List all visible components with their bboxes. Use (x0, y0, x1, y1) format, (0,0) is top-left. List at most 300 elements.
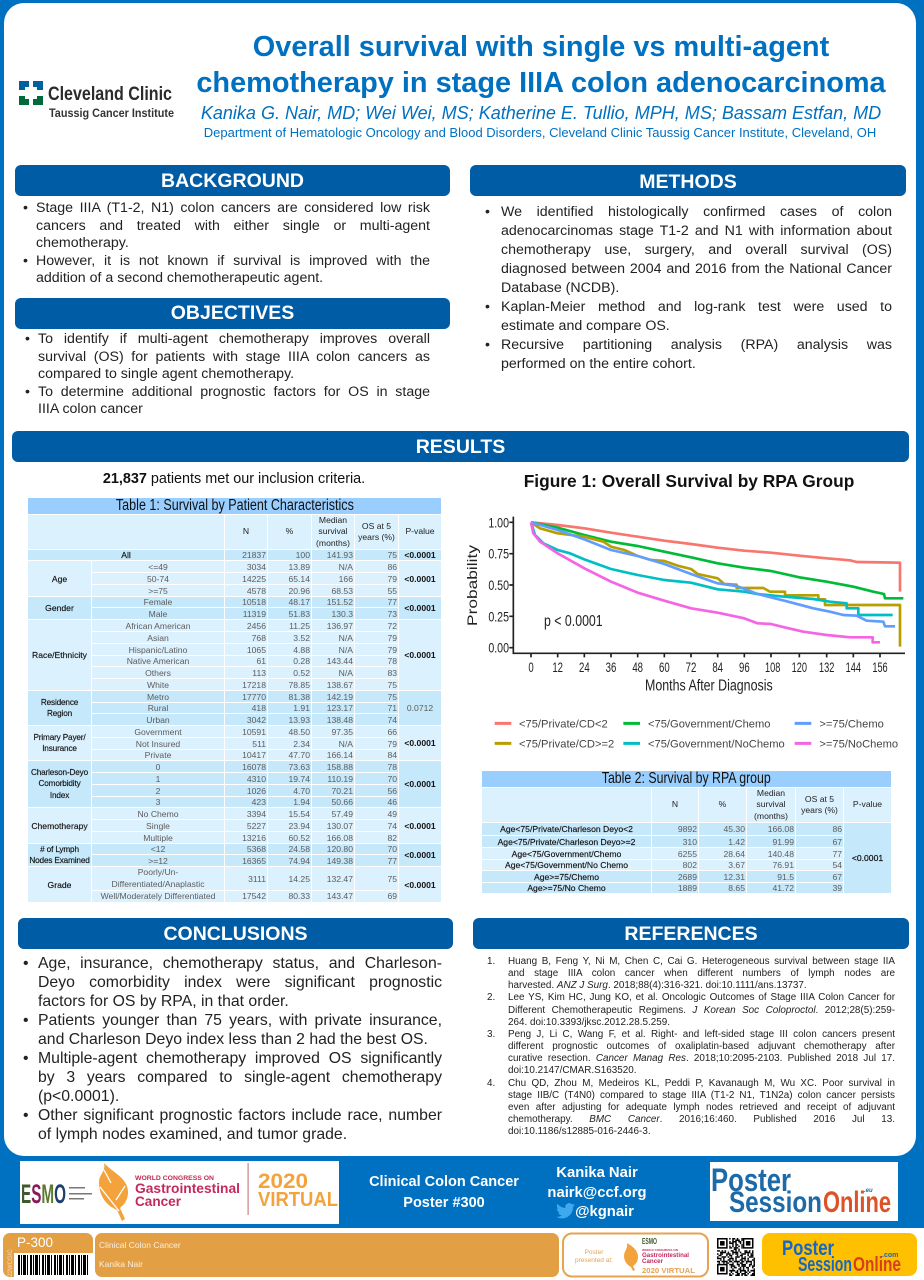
table 1: survival by patient characteristics: 75 (387, 550, 397, 560)
text: inclusion count: 21,837 patients met our inclusion criteria. (103, 471, 365, 487)
table 1: survival by patient characteristics: Not Insured (136, 738, 180, 748)
table 2: survival by RPA group: P-value (853, 799, 882, 809)
chart: Kaplan-Meier survival curves: p < 0.0001 (544, 613, 603, 630)
table 1: survival by patient characteristics: 166 (339, 574, 353, 584)
text: background bullets: However, it is not known if survival is improved with the addition of a second chemotherapeutic agent. (36, 252, 430, 286)
table 1: survival by patient characteristics: 511 (252, 738, 266, 748)
text: references list: Huang B, Feng Y, Ni M, Chen C, Cai G. Heterogeneous survival between stage IIA (508, 956, 895, 967)
table 2: survival by RPA group: 310 (683, 836, 697, 846)
table 1: survival by patient characteristics: Index (50, 791, 69, 800)
table 2: survival by RPA group: 802 (683, 860, 697, 870)
table 1: survival by patient characteristics: 83 (387, 668, 397, 678)
logo: Poster Session Online com: Online (853, 1254, 901, 1276)
y axis labels (488, 514, 509, 656)
badge: poster presented at: Gastrointestinal (642, 1253, 689, 1259)
table 1: survival by patient characteristics: 3042 (247, 714, 266, 724)
table 1: survival by patient characteristics: 77 (387, 856, 397, 866)
table 1: survival by patient characteristics: Hispanic/Latino (129, 644, 187, 654)
table 1: survival by patient characteristics: 73.63 (288, 762, 310, 772)
text: author contact: Kanika Nair (556, 1165, 638, 1181)
chart: Kaplan-Meier survival curves (464, 514, 905, 750)
text: references list: doi:10.1186/s12885-016-2446-3. (508, 1126, 651, 1137)
table 2: survival by RPA group: 67 (832, 872, 842, 882)
table 1: survival by patient characteristics: 1.94 (293, 797, 310, 807)
text: conclusions bullets: Patients younger than 75 years, with private insurance, and Charleson Deyo index less than 2 had the best OS. (38, 1012, 442, 1048)
table 1: survival by patient characteristics: 166.08 (327, 832, 353, 842)
text: methods bullets: performed on the entire cohort. (501, 356, 696, 372)
x axis labels: 60 (659, 659, 670, 675)
table 2: survival by RPA group: 1889 (678, 883, 697, 893)
heading: references (473, 918, 909, 949)
table 2: survival by RPA group: N (672, 799, 678, 809)
table 1: survival by patient characteristics: Poorly/Un- (138, 867, 178, 877)
table 2: survival by RPA group: 6255 (678, 848, 697, 858)
heading: methods (470, 165, 906, 196)
table 1: survival by patient characteristics: <0.0001 (404, 880, 436, 890)
table 2: survival by RPA group: 76.91 (772, 860, 794, 870)
table 1: survival by patient characteristics: 13.93 (288, 714, 310, 724)
table 2: survival by RPA group: 91.5 (777, 872, 794, 882)
text: 3. (487, 1029, 495, 1040)
table 1: survival by patient characteristics: 78 (387, 656, 397, 666)
table 2: survival by RPA group: % (719, 799, 726, 809)
table 2: survival by RPA group: Age<75/Private/Charleson Deyo<2 (500, 824, 633, 834)
table 1: survival by patient characteristics: 71 (387, 703, 397, 713)
table 1: survival by patient characteristics: 20.96 (288, 586, 310, 596)
table 1: survival by patient characteristics: 3111 (248, 874, 266, 884)
table 1: survival by patient characteristics: <0.0001 (404, 820, 436, 830)
table 2: survival by RPA group: 77 (832, 848, 842, 858)
table 1: survival by patient characteristics: Urban (146, 714, 170, 724)
table 1: survival by patient characteristics: 120.80 (327, 844, 353, 854)
chart legend: <75/Private/CD>=2 (519, 738, 614, 750)
table 1: survival by patient characteristics: 13.89 (288, 562, 310, 572)
text: session: Clinical Colon Cancer (99, 1240, 181, 1250)
table 1: survival by patient characteristics: 82 (387, 832, 397, 842)
table 2: survival by RPA group: 3.67 (728, 860, 745, 870)
table 1: survival by patient characteristics: 11319 (243, 608, 266, 618)
y axis labels: 0.25 (488, 608, 509, 624)
table 2: survival by RPA group: 9892 (678, 824, 697, 834)
table 2: survival by RPA group: OS at 5 years (%) (801, 794, 838, 815)
x axis labels (528, 659, 888, 675)
table 2: survival by RPA group: 8.65 (728, 883, 745, 893)
table 1: survival by patient characteristics: 77 (387, 597, 397, 607)
table 2: survival by RPA group: 140.48 (768, 848, 794, 858)
table 1: survival by patient characteristics: 74 (387, 714, 397, 724)
x axis labels: 144 (846, 659, 861, 675)
table 1: survival by patient characteristics: 110.19 (327, 774, 353, 784)
table 1: survival by patient characteristics: 4.88 (293, 644, 310, 654)
table 1: survival by patient characteristics: 0.52 (293, 668, 310, 678)
table 1: survival by patient characteristics: 1026 (247, 786, 266, 796)
table 2: survival by RPA group: Age>=75/Chemo (534, 872, 599, 882)
logo: Cleveland Clinic Taussig Cancer Institute (19, 81, 174, 120)
text: background bullets: Stage IIIA (T1-2, N1) colon cancers are considered low risk cancers and treated with either single or multi-agent chemotherapy. (36, 200, 430, 251)
x axis labels: 132 (819, 659, 834, 675)
table 1: survival by patient characteristics: <0.0001 (404, 650, 436, 660)
text: references list: even after adjusting for adequate lymph nodes retrieved and receipt of adjuvant (508, 1102, 895, 1113)
table 1: survival by patient characteristics: # of Lymph (40, 845, 79, 854)
text: objectives bullets (26, 331, 430, 417)
table 1: survival by patient characteristics: All (121, 550, 131, 560)
table 1: survival by patient characteristics: 10417 (242, 750, 266, 760)
text: author: Kanika Nair (99, 1259, 143, 1269)
text: references list: Lee YS, Kim HC, Jung KO, et al. Oncologic Outcomes of Stage IIIA Colon Cancer for (508, 992, 895, 1003)
table 1: survival by patient characteristics: 0 (156, 762, 160, 772)
table 1: survival by patient characteristics: <12 (151, 844, 165, 854)
table 1: survival by patient characteristics: 19.74 (288, 774, 310, 784)
table 1: survival by patient characteristics: 51.83 (288, 608, 310, 618)
table 1: survival by patient characteristics: 55 (387, 586, 397, 596)
text: session and poster number: Poster #300 (403, 1195, 485, 1211)
table 2: survival by RPA group: 91.99 (772, 836, 794, 846)
table 1: survival by patient characteristics: 17542 (242, 891, 266, 901)
figure heading: Figure 1: Overall Survival by RPA Group (524, 471, 854, 491)
table 1: survival by patient characteristics: 5368 (247, 844, 266, 854)
chart: Kaplan-Meier survival curves: Months After Diagnosis (645, 678, 773, 695)
table 1: survival by patient characteristics: Median survival (months) (316, 515, 350, 548)
table 1: survival by patient characteristics: 86 (387, 562, 397, 572)
chart legend (495, 718, 898, 750)
table 1: survival by patient characteristics: 79 (387, 738, 397, 748)
table 1: survival by patient characteristics: 138.67 (327, 680, 353, 690)
table 1: survival by patient characteristics: 70 (387, 844, 397, 854)
table 1: survival by patient characteristics: 75 (387, 680, 397, 690)
table 1: survival by patient characteristics: 166.14 (327, 750, 353, 760)
heading: objectives: OBJECTIVES (171, 302, 294, 324)
logo: Poster Session Online com: Poster (782, 1237, 834, 1260)
table 1: survival by patient characteristics: Grade (48, 880, 71, 890)
table 1: survival by patient characteristics: White (147, 680, 169, 690)
table 1: survival by patient characteristics: 47.70 (288, 750, 310, 760)
table 1: survival by patient characteristics: 78.85 (288, 680, 310, 690)
table 1: survival by patient characteristics: 10591 (242, 726, 266, 736)
table 1: survival by patient characteristics: 49 (387, 808, 397, 818)
title (196, 31, 886, 98)
table 1: survival by patient characteristics: 149.38 (327, 856, 353, 866)
table 1: survival by patient characteristics: 3394 (247, 808, 266, 818)
tag: poster number and barcode (3, 1233, 93, 1277)
text: references list (487, 956, 895, 1137)
text: references list: stage IIB/C (T4N0) compared to stage IIIA (T1-2 N1, T1N2a) colon cancer persists (508, 1090, 895, 1101)
logo: Poster Session Online eu (710, 1162, 898, 1221)
chart legend: >=75/NoChemo (819, 738, 898, 750)
table 1: survival by patient characteristics: 1.91 (293, 703, 310, 713)
table 1: survival by patient characteristics: 57.49 (331, 808, 353, 818)
table 1: survival by patient characteristics: 130.07 (327, 820, 353, 830)
table 1: survival by patient characteristics: 0.28 (293, 656, 310, 666)
chart: Kaplan-Meier survival curves: Probability (464, 545, 480, 626)
table 1: survival by patient characteristics: No Chemo (137, 808, 179, 818)
table 1: survival by patient characteristics: 81.38 (288, 692, 310, 702)
table 1: survival by patient characteristics: 138.48 (327, 714, 353, 724)
table 2: survival by RPA group: Age<75/Government/Chemo (512, 848, 621, 858)
table 1: survival by patient characteristics: >=12 (148, 856, 168, 866)
table 1: survival by patient characteristics: 78 (387, 762, 397, 772)
table 1: survival by patient characteristics: 4310 (247, 774, 266, 784)
tag: session and author (95, 1233, 559, 1277)
table 2: survival by RPA group: Table 2: Survival by RPA group (602, 770, 771, 787)
authors: Kanika G. Nair, MD; Wei Wei, MS; Katherine E. Tullio, MPH, MS; Bassam Estfan, MD (201, 103, 881, 123)
table 1: survival by patient characteristics: N/A (339, 738, 353, 748)
table 1: survival by patient characteristics: Single (146, 820, 170, 830)
table 1: survival by patient characteristics: 4.70 (293, 786, 310, 796)
x axis labels: 24 (579, 659, 590, 675)
table 1: survival by patient characteristics: African American (126, 620, 190, 630)
chart legend: >=75/Chemo (819, 718, 884, 730)
table 1: survival by patient characteristics: 79 (387, 644, 397, 654)
table 1: survival by patient characteristics: 13216 (242, 832, 266, 842)
table 1: survival by patient characteristics: 2.34 (293, 738, 310, 748)
table 1: survival by patient characteristics: 16365 (242, 856, 266, 866)
heading: results (12, 431, 909, 462)
text: objectives bullets: To determine additional prognostic factors for OS in stage (38, 384, 430, 400)
table 2: survival by RPA group: 28.64 (723, 848, 745, 858)
x axis labels: 36 (606, 659, 616, 675)
table 1: survival by patient characteristics: 72 (387, 620, 397, 630)
table 1: survival by patient characteristics: 136.97 (327, 620, 353, 630)
text: methods bullets: Kaplan-Meier method and log-rank test were used to (501, 299, 892, 315)
table 1: survival by patient characteristics: 123.17 (327, 703, 353, 713)
table 1: survival by patient characteristics: 48.17 (288, 597, 310, 607)
text: vertical code: 22WCGIC (8, 1249, 14, 1277)
table 1: survival by patient characteristics: 768 (252, 632, 266, 642)
table 1: survival by patient characteristics: P-value (405, 526, 435, 536)
table 2: survival by RPA group: 45.30 (723, 824, 745, 834)
table 2: survival by RPA group: 12.31 (723, 872, 745, 882)
table 1: survival by patient characteristics: N (243, 526, 249, 536)
text: 4. (487, 1078, 495, 1089)
table 1: survival by patient characteristics: 141.93 (327, 550, 353, 560)
table 1: survival by patient characteristics: 142.19 (327, 692, 353, 702)
table 1: survival by patient characteristics: Native American (127, 656, 189, 666)
logo: Poster Session Online eu: .eu (864, 1188, 873, 1194)
text: 1. (487, 956, 495, 967)
text: conclusions bullets (24, 955, 442, 1143)
table 2: survival by RPA group: Age<75/Private/Charleson Deyo>=2 (498, 836, 635, 846)
y axis labels: 1.00 (488, 514, 509, 530)
table 1: survival by patient characteristics: 113 (252, 668, 266, 678)
table 1: survival by patient characteristics: 50.66 (331, 797, 353, 807)
table 1: survival by patient characteristics: Female (144, 597, 172, 607)
heading: background (15, 165, 450, 196)
table 1: survival by patient characteristics: Residence (41, 698, 78, 707)
table 1: survival by patient characteristics: Charleson-Deyo (31, 768, 88, 777)
table 1: survival by patient characteristics: 143.47 (327, 891, 353, 901)
chart legend: <75/Government/NoChemo (648, 738, 785, 750)
table 2: survival by RPA group: 41.72 (772, 883, 794, 893)
table 1: survival by patient characteristics: 79 (387, 632, 397, 642)
table 1: survival by patient characteristics: Table 1: Survival by Patient Characteristics (116, 498, 353, 514)
table 1: survival by patient characteristics: Differentiated/Anaplastic (112, 879, 204, 889)
table 1: survival by patient characteristics: 74 (387, 820, 397, 830)
table 1: survival by patient characteristics: <=49 (148, 562, 168, 572)
affiliation: Department of Hematologic Oncology and Blood Disorders, Cleveland Clinic Taussig Cancer Institute, Cleveland, OH (204, 125, 876, 140)
table 1: survival by patient characteristics: 14225 (242, 574, 266, 584)
heading: conclusions: CONCLUSIONS (163, 923, 308, 945)
table 1: survival by patient characteristics: Asian (147, 632, 169, 642)
table 1: survival by patient characteristics: 70 (387, 774, 397, 784)
logo: Poster Session Online com (762, 1233, 917, 1276)
text: methods bullets: estimate and compare OS. (501, 318, 670, 334)
text: references list: curative resection. Cancer Manag Res. 2018;10:2095-2103. Published 2018 Jul 17. (508, 1053, 895, 1064)
table 2: survival by RPA group: Median survival (months) (754, 788, 788, 821)
table 1: survival by patient characteristics: Rural (148, 703, 168, 713)
x axis labels: 0 (528, 659, 534, 675)
logo: ESMO GI Congress 2020 Virtual: ESMO (21, 1179, 66, 1209)
x axis labels: 72 (686, 659, 696, 675)
barcode (14, 1253, 93, 1277)
text: session and poster number (369, 1174, 519, 1211)
table 1: survival by patient characteristics: Private (145, 750, 171, 760)
QR code (717, 1238, 755, 1276)
table 2: survival by RPA group: 1.42 (728, 836, 745, 846)
title: Overall survival with single vs multi-agent (253, 31, 829, 63)
table 1: survival by patient characteristics: 11.25 (289, 620, 310, 630)
badge: poster presented at: Poster (585, 1249, 604, 1256)
table 1: survival by patient characteristics: 2 (156, 786, 160, 796)
badge: poster presented at: 2020 VIRTUAL (642, 1268, 696, 1275)
survival curves (531, 522, 903, 647)
text: references list: Different Chemotherapeutic Regimens. J Korean Soc Coloproctol. 2012;28(5):259- (508, 1005, 895, 1016)
table 1: survival by patient characteristics: 73 (387, 608, 397, 618)
table 1: survival by patient characteristics: 16078 (242, 762, 266, 772)
table 2: survival by RPA group: 166.08 (768, 824, 794, 834)
table 1: survival by patient characteristics: 17218 (242, 680, 266, 690)
logo: Poster Session Online eu: Session (729, 1186, 822, 1219)
table 1: survival by patient characteristics: 1065 (247, 644, 266, 654)
logo: Cleveland Clinic Taussig Cancer Institute: Taussig Cancer Institute (49, 108, 174, 120)
table 1: survival by patient characteristics: Race/Ethnicity (32, 650, 87, 660)
logo: Poster Session Online com: .com (882, 1252, 898, 1259)
text: author contact (547, 1165, 647, 1220)
logo: Poster Session Online eu: Poster (711, 1162, 791, 1198)
text: methods bullets: We identified histologically confirmed cases of colon adenocarcinomas stage T1-2 and N1 with information about chemotherapy use, surgery, and overall survival (OS) diagnosed between 2004 and 2016 from the National Cancer Database (NCDB). (501, 204, 892, 296)
table 1: survival by patient characteristics: 418 (252, 703, 266, 713)
table 1: survival by patient characteristics: % (286, 526, 293, 536)
text: conclusions bullets: Age, insurance, chemotherapy status, and Charleson-Deyo comorbidity index were significant prognostic factors for OS by RPA, in that order. (38, 955, 442, 1010)
icon: twitter bird (556, 1203, 575, 1218)
title: chemotherapy in stage IIIA colon adenocarcinoma (196, 66, 886, 98)
table 1: survival by patient characteristics: 50-74 (147, 574, 169, 584)
table 1: survival by patient characteristics: N/A (339, 632, 353, 642)
table 1: survival by patient characteristics: <0.0001 (404, 603, 436, 613)
table 2: survival by RPA group: Age<75/Government/No Chemo (505, 860, 628, 870)
table 1: survival by patient characteristics: 3.52 (293, 632, 310, 642)
table 1: survival by patient characteristics: 10518 (242, 597, 266, 607)
table 2: survival by RPA group: <0.0001 (852, 853, 883, 863)
table 1: survival by patient characteristics: 24.58 (288, 844, 310, 854)
table 1: survival by patient characteristics: Comorbidity (38, 779, 81, 788)
table 1: survival by patient characteristics: <0.0001 (404, 779, 436, 789)
x axis labels: 84 (712, 659, 723, 675)
table 1: survival by patient characteristics: 4578 (247, 586, 266, 596)
table 1: survival by patient characteristics: Chemotherapy (31, 820, 88, 830)
table 1: survival by patient characteristics (28, 498, 441, 902)
table 1: survival by patient characteristics: 23.94 (288, 820, 310, 830)
table 1: survival by patient characteristics: 60.52 (288, 832, 310, 842)
logo: ESMO GI Congress 2020 Virtual: WORLD CONGRESS ON (135, 1175, 215, 1182)
table 1: survival by patient characteristics: 56 (387, 786, 397, 796)
badge: poster presented at: Cancer (642, 1259, 664, 1265)
table 1: survival by patient characteristics: 46 (387, 797, 397, 807)
table 1: survival by patient characteristics: <0.0001 (404, 738, 436, 748)
text: references list: chemotherapy. BMC Cancer. 2016;16:460. Published 2016 Jul 13. (508, 1114, 895, 1125)
x axis labels: 108 (765, 659, 780, 675)
logo: ESMO GI Congress 2020 Virtual (20, 1161, 339, 1224)
heading: conclusions (18, 918, 453, 949)
table 2: survival by RPA group: 54 (832, 860, 842, 870)
table 1: survival by patient characteristics: Others (145, 668, 171, 678)
text: 2. (487, 992, 495, 1003)
table 1: survival by patient characteristics: Multiple (143, 832, 173, 842)
table 1: survival by patient characteristics: Metro (147, 692, 169, 702)
text: objectives bullets: To identify if multi-agent chemotherapy improves overall survival (OS) for patients with stage IIIA colon cancers as compared to single agent chemotherapy. (38, 331, 430, 382)
table 1: survival by patient characteristics: 100 (296, 550, 310, 560)
table 1: survival by patient characteristics: 70.21 (331, 786, 353, 796)
badge: poster presented at (562, 1232, 709, 1278)
table 1: survival by patient characteristics: N/A (339, 644, 353, 654)
table 1: survival by patient characteristics: 158.88 (327, 762, 353, 772)
table 2: survival by RPA group: 2689 (678, 872, 697, 882)
table 1: survival by patient characteristics: 14.25 (288, 874, 310, 884)
table 1: survival by patient characteristics: 80.33 (288, 891, 310, 901)
table 1: survival by patient characteristics: 151.52 (327, 597, 353, 607)
table 1: survival by patient characteristics: >=75 (148, 586, 168, 596)
x axis labels: 96 (739, 659, 750, 675)
table 1: survival by patient characteristics: 75 (387, 874, 397, 884)
heading: references: REFERENCES (624, 923, 758, 945)
table 1: survival by patient characteristics: 17770 (242, 692, 266, 702)
text: references list: Chu QD, Zhou M, Medeiros KL, Peddi P, Kavanaugh M, Wu XC. Poor survival in (508, 1078, 895, 1089)
table 1: survival by patient characteristics: 3 (156, 797, 160, 807)
table 1: survival by patient characteristics: <0.0001 (404, 850, 436, 860)
logo: ESMO GI Congress 2020 Virtual: 2020 (258, 1170, 308, 1193)
y axis labels: 0.50 (488, 577, 509, 593)
table 1: survival by patient characteristics: 66 (387, 726, 397, 736)
badge: poster presented at: WORLD CONGRESS ON (642, 1248, 678, 1252)
badge: poster presented at: presented at: (575, 1257, 613, 1264)
text: conclusions bullets: Other significant prognostic factors include race, number of lymph nodes examined, and tumor grade. (38, 1107, 442, 1143)
table 2: survival by RPA group: 86 (832, 824, 842, 834)
table 1: survival by patient characteristics: <0.0001 (404, 550, 436, 560)
text: conclusions bullets: Multiple-agent chemotherapy improved OS significantly by 3 years compared to single-agent chemotherapy (p<0.0001). (38, 1050, 442, 1105)
text: references list: harvested. ANZ J Surg. 2018;88(4):316-321. doi:10.1111/ans.13737. (508, 980, 807, 991)
table 2: survival by RPA group: 39 (832, 883, 842, 893)
table 1: survival by patient characteristics: 1 (156, 774, 160, 784)
text: references list: doi:10.2147/CMAR.S163520. (508, 1065, 636, 1076)
table 1: survival by patient characteristics: Nodes Examined (29, 856, 90, 865)
table 1: survival by patient characteristics: Region (47, 709, 72, 718)
heading: objectives (15, 298, 450, 329)
table 1: survival by patient characteristics: Well/Moderately Differentiated (101, 891, 215, 901)
table 1: survival by patient characteristics: 423 (252, 797, 266, 807)
heading: background: BACKGROUND (161, 170, 304, 192)
chart legend: <75/Private/CD<2 (519, 718, 608, 730)
table 1: survival by patient characteristics: 5227 (247, 820, 266, 830)
table 2: survival by RPA group: 67 (832, 836, 842, 846)
table 1: survival by patient characteristics: 132.47 (327, 874, 353, 884)
table 1: survival by patient characteristics: OS at 5 years (%) (358, 521, 395, 542)
badge: poster presented at: ESMO (642, 1237, 657, 1246)
table 1: survival by patient characteristics: Age (52, 574, 67, 584)
logo: ESMO GI Congress 2020 Virtual: Gastrointestinal (135, 1180, 240, 1196)
x axis labels: 120 (792, 659, 807, 675)
table 1: survival by patient characteristics: 74.94 (288, 856, 310, 866)
table 1: survival by patient characteristics: 48.50 (288, 726, 310, 736)
heading: results: RESULTS (416, 436, 505, 458)
